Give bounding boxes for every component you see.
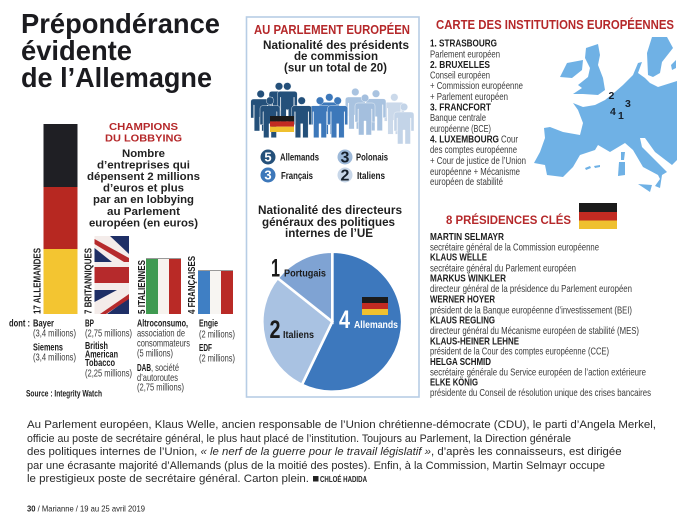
presidencies list [430,232,651,399]
bar labels: 7 BRITANNIQUES [84,248,94,314]
panel: champions du lobbying heading: d’euros et plus [103,182,184,194]
institutions list: Conseil européen [430,70,490,82]
institutions list: Cour [501,134,518,146]
lobbying companies: Engie [199,319,218,330]
map of europe [534,37,677,192]
lobbying companies: British [85,341,108,352]
lobbying companies: (5 millions) [137,349,173,360]
map numbers [608,90,631,122]
legend: presidents: Allemands [280,153,319,164]
institutions list: 4. LUXEMBOURG [430,134,499,146]
institutions list: européenne (BCE) [430,124,491,135]
panel: champions du lobbying heading: CHAMPIONS [109,121,178,133]
pie labels: 2 [270,316,280,344]
pie labels: Italiens [283,330,314,341]
institutions list: 2. BRUXELLES [430,60,490,71]
lobbying companies: Bayer [33,319,54,330]
presidencies list: KLAUS WELLE [430,253,487,264]
panel: champions du lobbying heading: européen (en euros) [89,218,198,230]
title: Prépondérance [21,8,220,39]
presidents chart title: Nationalité des présidents [263,38,409,52]
lobbying companies: d’autoroutes [137,373,178,384]
pictogram: presidents by nationality [251,82,414,144]
institutions list: Banque centrale [430,113,486,124]
lobbying companies: BP [85,319,94,330]
directors chart title: généraux des politiques [262,215,395,229]
source: Source : Integrity Watch [26,389,102,399]
lobbying companies [9,319,235,394]
lobbying companies: (3,4 millions) [33,329,76,340]
panel: champions du lobbying heading: DU LOBBYING [105,132,182,144]
map numbers: 1 [618,110,624,122]
directors chart title: internes de l’UE [285,226,373,240]
legend: presidents: 3 [264,168,272,182]
lobbying companies: (2,75 millions) [137,383,184,394]
presidents chart title [263,38,409,74]
lobbying companies: , société [151,363,179,374]
article text: CHLOÉ HADIDA [320,475,367,484]
bar labels: 17 ALLEMANDES [33,248,44,314]
lobbying companies: dont : [9,319,30,330]
presidencies list: MARKUS WINKLER [430,274,506,285]
map numbers: 4 [610,106,616,118]
pie labels: 1 [271,255,280,283]
lobbying companies: American [85,350,118,361]
lobbying companies: EDF [199,343,212,354]
legend: presidents: Français [281,171,313,182]
title [21,8,220,93]
presidencies list: président de la Cour des comptes européenne (CCE) [430,347,609,358]
legend: presidents: Polonais [356,153,388,164]
bar: germany flag [44,124,78,314]
article text: Au Parlement européen, Klaus Welle, ancien responsable de l’Union chrétienne-démocrate (CDU), le parti d’Angela Merkel, [27,419,656,431]
article text: par une écrasante majorité d’Allemands (plus de la moitié des postes). Enfin, à la Commission, Martin Selmayr occupe [27,460,605,472]
presidencies list: KLAUS-HEINER LEHNE [430,336,519,347]
panel: champions du lobbying heading: d’entreprises qui [97,160,190,172]
bar: france flag [198,270,233,314]
bar labels [33,248,198,314]
panel: champions du lobbying heading: dépensent 2 millions [87,171,200,183]
page footer: 30 / Marianne / 19 au 25 avril 2019 [27,504,145,514]
article text: le prestigieux poste de secrétaire général. Carton plein. [27,473,309,485]
lobbying companies: consommateurs [137,339,190,350]
presidencies list: KLAUS REGLING [430,315,495,326]
legend: presidents: 2 [341,168,350,184]
icon: germany flag [579,203,617,229]
presidencies list: ELKE KÖNIG [430,375,478,388]
legend: presidents: Italiens [357,171,385,182]
presidencies list: secrétaire général du Parlement européen [430,263,576,274]
panel: champions du lobbying heading: Nombre [122,148,165,160]
presidencies list: WERNER HOYER [430,295,495,306]
presidencies list: MARTIN SELMAYR [430,232,504,243]
presidencies heading: 8 PRÉSIDENCES CLÉS [446,212,571,227]
institutions list [430,39,526,188]
panel: au parlement européen [246,17,419,397]
bar: united kingdom flag [94,236,129,314]
panel heading: AU PARLEMENT EUROPÉEN [254,22,410,37]
lobbying companies: DAB [137,363,151,374]
lobbying companies: Altroconsumo, [137,319,188,330]
title: évidente [21,35,132,66]
institutions list: + Cour de justice de l’Union [430,156,526,167]
lobbying companies: (2 millions) [199,354,235,365]
icon: germany flag on pie [362,297,388,315]
lobbying companies: (2,25 millions) [85,369,132,380]
lobbying companies: Tobacco [85,358,115,369]
lobbying companies: Siemens [33,343,63,354]
institutions list: 3. FRANCFORT [430,102,492,114]
article text [27,419,656,485]
institutions list: + Commission européenne [430,81,523,92]
pie chart: directors by nationality [262,252,402,392]
institutions list: européenne + Mécanisme [430,167,520,178]
legend: presidents: 3 [341,150,350,166]
lobbying companies: (2 millions) [199,329,235,340]
pie labels: Portugais [284,269,326,280]
lobbying companies: (2,75 millions) [85,329,132,340]
lobbying companies: association de [137,329,185,340]
panel: champions du lobbying heading: par an en lobbying [93,194,194,206]
presidents chart title: de commission [294,49,378,63]
presidents chart title: (sur un total de 20) [284,60,387,74]
map numbers: 3 [625,98,631,110]
pie labels [270,255,398,344]
institutions list: Parlement européen [430,49,500,60]
bar: italy flag [146,258,181,314]
institutions list: des comptes européenne [430,145,517,156]
map numbers: 2 [608,90,614,102]
bar labels: 5 ITALIENNES [137,260,148,314]
panel: champions du lobbying heading: au Parlement [107,206,180,218]
directors chart title [258,203,402,240]
lobbying companies: (3,4 millions) [33,353,76,364]
pie labels: Allemands [354,320,398,331]
presidencies list: secrétaire général de la Commission européenne [430,243,599,254]
legend: presidents [260,150,388,184]
article text: officie au poste de secrétaire général, le plus haut placé de l’institution. Toujours au Parlement, la Direction générale [27,433,571,445]
pie labels: 4 [339,306,350,334]
title: de l’Allemagne [21,62,212,93]
institutions list: + Parlement européen [430,92,508,103]
directors chart title: Nationalité des directeurs [258,203,402,217]
article text: des politiques internes de l’Union, « le nerf de la guerre pour le travail législatif », d’après les connaisseurs, est dirigée [27,446,622,458]
presidencies list: HELGA SCHMID [430,357,491,368]
institutions list: 1. STRASBOURG [430,39,497,50]
legend: presidents: 5 [264,150,272,164]
panel: champions du lobbying heading [87,121,200,230]
bar labels: 4 FRANÇAISES [187,256,198,314]
institutions list: européen de stabilité [430,177,503,188]
